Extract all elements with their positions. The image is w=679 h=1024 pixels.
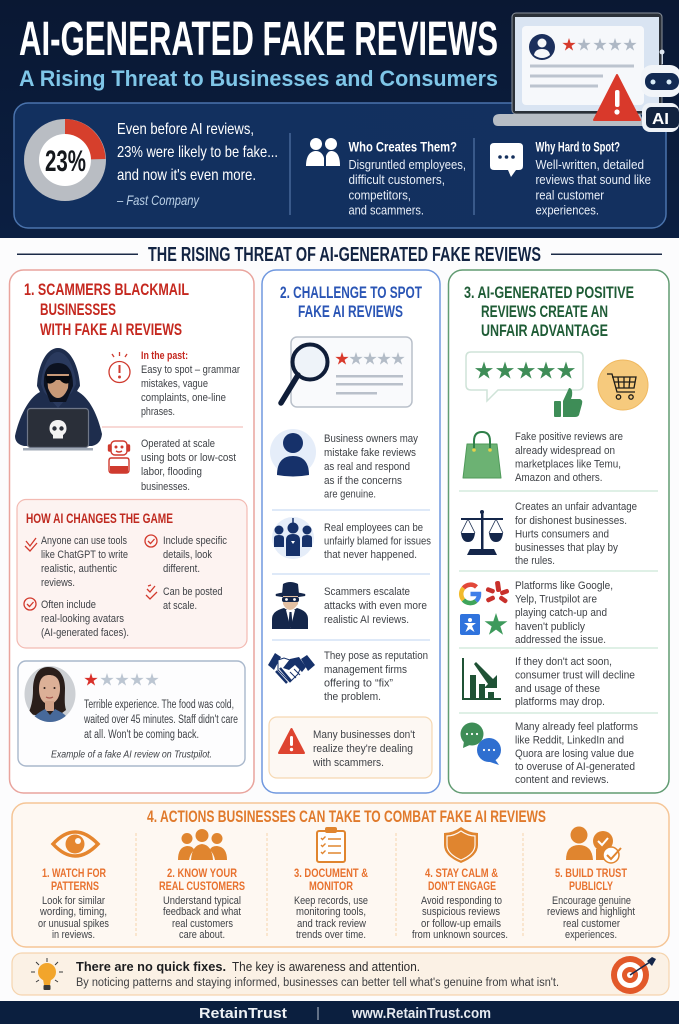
quote: Even before AI reviews, <box>117 121 254 138</box>
text: unfair advantage: Creates an unfair advantage <box>515 501 637 513</box>
text: in the past: Easy to spot – grammar <box>141 364 240 376</box>
caption: Example of a fake AI review on Trustpilot. <box>51 750 212 760</box>
text: no quick fixes <box>76 959 559 989</box>
text: right list: Include specific <box>163 535 227 547</box>
callout: how AI changes the game: HOW AI CHANGES THE GAME <box>26 510 173 526</box>
quote <box>116 121 278 208</box>
panel 1: scammers blackmail <box>10 270 254 793</box>
block: why hard to spot: experiences. <box>536 202 599 218</box>
icon: robot: AI <box>652 111 669 128</box>
action 1: watch for patterns: or unusual spikes <box>38 918 109 930</box>
text: losing value: Quora are losing value due <box>515 748 634 760</box>
action 1: watch for patterns <box>38 832 109 941</box>
illustration: magnifier over review card <box>281 337 412 407</box>
text: business owners: Business owners may <box>324 433 418 445</box>
section heading: THE RISING THREAT OF AI-GENERATED FAKE REVIEWS <box>148 244 541 266</box>
action 3: document and monitor: and track review <box>297 918 366 930</box>
text: operated at scale: labor, flooding <box>141 466 202 478</box>
text: marketplaces: Amazon and others. <box>515 472 602 484</box>
action 4: stay calm: or follow-up emails <box>421 918 501 930</box>
text: consumer trust: If they don't act soon, <box>515 656 612 668</box>
panel 2 heading <box>280 284 422 321</box>
block: who creates them: competitors, <box>348 188 411 202</box>
panel 2 heading: FAKE AI REVIEWS <box>298 303 403 321</box>
panel 3 heading <box>464 284 634 340</box>
icon: handshake <box>268 653 315 683</box>
action 5: build trust <box>547 826 635 941</box>
icon: robot <box>641 50 679 132</box>
text: consumer trust: consumer trust will decline <box>515 670 635 682</box>
icon: chat bubble <box>490 143 523 177</box>
block: why hard to spot: real customer <box>536 188 605 202</box>
text: marketplaces: already widespread on <box>515 445 615 457</box>
action 4: stay calm: DON'T ENGAGE <box>428 879 496 893</box>
text: left list: reviews. <box>41 577 75 589</box>
block: who creates them <box>348 138 466 218</box>
text: reputation firms: management firms <box>324 664 407 676</box>
icon: bot <box>108 441 130 473</box>
quote: and now it's even more. <box>117 167 256 184</box>
action 4: stay calm: 4. STAY CALM & <box>425 866 498 880</box>
text: left list: real-looking avatars <box>41 613 124 625</box>
text: scammers escalate: attacks with even more <box>324 600 427 612</box>
text: reputation firms: They pose as reputation <box>324 650 428 662</box>
text: left list: (AI-generated faces). <box>41 627 129 639</box>
action 3: document and monitor: MONITOR <box>309 879 353 893</box>
footer <box>0 1001 679 1024</box>
text: consumer trust <box>515 656 635 708</box>
action 4: stay calm: suspicious reviews <box>422 906 500 918</box>
icon: check marks <box>24 535 157 610</box>
text: losing value: to overuse of AI-generated <box>515 761 635 773</box>
text: in the past: mistakes, vague <box>141 378 208 390</box>
text: platforms: haven't publicly <box>515 621 585 633</box>
text: warning: realize they're dealing <box>313 743 413 755</box>
block: why hard to spot: Well-written, detailed <box>536 157 644 172</box>
icon: clipboard <box>317 827 345 862</box>
action 5: build trust: 5. BUILD TRUST <box>555 866 628 880</box>
text: operated at scale: Operated at scale <box>141 438 215 450</box>
icon: target with arrow <box>611 956 656 994</box>
text: no quick fixes: The key is awareness and attention. <box>232 959 420 974</box>
action 5: build trust: experiences. <box>565 929 617 941</box>
text: in the past: phrases. <box>141 406 175 418</box>
text: unfair advantage: for dishonest businesses. <box>515 515 627 527</box>
subtitle: A Rising Threat to Businesses and Consumers <box>19 66 498 91</box>
text: left list: like ChatGPT to write <box>41 549 128 561</box>
text: employees: Real employees can be <box>324 522 423 534</box>
action 3: document and monitor: 3. DOCUMENT & <box>294 866 368 880</box>
action 2: know your real customers: care about. <box>179 929 225 941</box>
text: left list: Often include <box>41 599 96 611</box>
callout: warning <box>269 717 432 778</box>
text: right list: at scale. <box>163 600 197 612</box>
icon: warning <box>279 729 304 753</box>
text: review: at all. Won't be coming back. <box>84 729 199 741</box>
text: unfair advantage: businesses that play by <box>515 542 618 554</box>
action 5: build trust: PUBLICLY <box>569 879 613 893</box>
text: unfair advantage: the rules. <box>515 555 555 567</box>
icon: shopping cart <box>598 360 648 410</box>
panel 2 heading: 2. CHALLENGE TO SPOT <box>280 284 422 302</box>
action 4: stay calm: from unknown sources. <box>412 929 508 941</box>
action 2: know your real customers: Understand typical <box>163 895 241 907</box>
action 5: build trust: Encourage genuine <box>552 895 631 907</box>
text: warning: with scammers. <box>312 757 384 769</box>
text: platforms: Yelp, Trustpilot are <box>515 594 597 606</box>
donut chart: 23%: 23% <box>45 145 86 178</box>
panel 3: positive reviews <box>448 270 669 793</box>
panel 1 heading: WITH FAKE AI REVIEWS <box>40 321 182 339</box>
action 2: know your real customers: real customers <box>172 918 233 930</box>
icon: scammer in hat <box>272 582 308 629</box>
icon: alert circle <box>109 352 130 382</box>
text: warning: Many businesses don't <box>313 729 415 741</box>
block: why hard to spot: Why Hard to Spot? <box>536 138 620 154</box>
icon: customers <box>178 829 227 860</box>
action 5: build trust: real customer <box>563 918 620 930</box>
action 3: document and monitor: monitoring tools, <box>296 906 366 918</box>
block: why hard to spot <box>536 138 651 218</box>
block: why hard to spot: reviews that sound like <box>536 172 651 187</box>
stats panel <box>14 103 666 228</box>
callout: how AI changes the game <box>17 500 247 648</box>
text: no quick fixes: There are no quick fixes. <box>76 959 226 974</box>
icon: person with checks <box>566 826 621 863</box>
action 5: build trust: reviews and highlight <box>547 906 635 918</box>
icon: hooded hacker with laptop <box>15 348 102 450</box>
icon: declining chart <box>463 658 501 699</box>
text: business owners: as if the concerns <box>324 475 402 487</box>
text: unfair advantage <box>515 501 637 567</box>
text: no quick fixes: By noticing patterns and staying informed, businesses can better tell what's genuine from what isn't. <box>76 977 559 989</box>
text: reputation firms <box>324 650 428 703</box>
icon: laptop with one-star review <box>493 13 662 126</box>
text: platforms: Platforms like Google, <box>515 580 613 592</box>
text: reputation firms: the problem. <box>324 691 381 703</box>
block: who creates them: Who Creates Them? <box>348 138 457 154</box>
text: employees: that never happened. <box>324 549 417 561</box>
action 1: watch for patterns: PATTERNS <box>51 879 99 893</box>
text: consumer trust: platforms may drop. <box>515 696 605 708</box>
icon: scales of justice <box>461 510 503 555</box>
text: in the past: complaints, one-line <box>141 392 226 404</box>
icon: shopping bag <box>463 432 501 478</box>
quote: – Fast Company <box>116 192 200 208</box>
takeaway bar <box>12 953 669 995</box>
icon: shield <box>444 827 478 863</box>
text: platforms: playing catch-up and <box>515 607 607 619</box>
text: operated at scale: using bots or low-cost <box>141 452 236 464</box>
icon: business owner <box>270 429 316 476</box>
text: employees: unfairly blamed for issues <box>324 536 431 548</box>
action 1: watch for patterns: in reviews. <box>52 929 95 941</box>
icon: chat bubbles <box>460 722 501 765</box>
panel 1 heading <box>24 281 189 339</box>
action 4: stay calm <box>412 827 508 941</box>
text: marketplaces: Fake positive reviews are <box>515 431 623 443</box>
text: business owners: as real and respond <box>324 461 410 473</box>
header banner <box>0 0 679 238</box>
text: review: Terrible experience. The food was cold, <box>84 699 234 711</box>
action 2: know your real customers: feedback and what <box>163 906 241 918</box>
action 1: watch for patterns: 1. WATCH FOR <box>42 866 106 880</box>
text: warning <box>312 729 415 769</box>
text: unfair advantage: Hurts consumers and <box>515 528 609 540</box>
icon: warning triangle <box>594 75 640 120</box>
text: platforms: addressed the issue. <box>515 634 606 646</box>
text: scammers escalate <box>324 586 427 626</box>
text: employees <box>324 522 431 561</box>
rating: one star <box>84 673 159 686</box>
panel 4: actions <box>12 803 669 947</box>
text: losing value <box>515 721 638 786</box>
panel 1 heading: BUSINESSES <box>40 301 116 319</box>
text: platforms <box>515 580 613 646</box>
block: who creates them: Disgruntled employees, <box>348 157 466 172</box>
photo: AI-generated face <box>24 665 76 724</box>
text: left list <box>41 535 129 639</box>
text: scammers escalate: Scammers escalate <box>324 586 410 598</box>
icons: platform logos <box>460 581 510 635</box>
text: losing value: like Reddit, LinkedIn and <box>515 734 624 746</box>
action 3: document and monitor <box>294 827 368 941</box>
footer: RetainTrust <box>199 1005 287 1022</box>
text: right list: Can be posted <box>163 586 222 598</box>
text: business owners: mistake fake reviews <box>324 447 416 459</box>
action 2: know your real customers: REAL CUSTOMERS <box>159 879 245 893</box>
donut chart: 23% <box>24 119 106 201</box>
action 3: document and monitor: trends over time. <box>296 929 366 941</box>
action 1: watch for patterns: Look for similar <box>42 895 105 907</box>
text: losing value: Many already feel platforms <box>515 721 638 733</box>
text: reputation firms: offering to “fix” <box>324 678 393 690</box>
block: who creates them: and scammers. <box>348 202 424 218</box>
text: business owners: are genuine. <box>324 488 376 500</box>
action 3: document and monitor: Keep records, use <box>294 895 368 907</box>
text: business owners <box>324 433 418 500</box>
text: marketplaces: marketplaces like Temu, <box>515 458 621 470</box>
icon: people <box>306 138 340 166</box>
action 2: know your real customers: 2. KNOW YOUR <box>167 866 237 880</box>
icon: light bulb <box>31 958 63 990</box>
text: right list: details, look <box>163 549 212 561</box>
action 2: know your real customers <box>159 829 245 941</box>
quote: 23% were likely to be fake... <box>117 144 278 161</box>
text: left list: realistic, authentic <box>41 563 117 575</box>
text: losing value: content and reviews. <box>515 774 609 786</box>
card: example fake review <box>18 661 245 766</box>
text: review <box>83 699 238 741</box>
text: scammers escalate: realistic AI reviews. <box>324 614 409 626</box>
text: review: waited over 45 minutes. Staff didn't care <box>83 714 238 726</box>
footer: www.RetainTrust.com <box>351 1005 491 1022</box>
text: consumer trust: and usage of these <box>515 683 600 695</box>
illustration: five-star bubble with thumb <box>466 352 583 417</box>
icon: eye <box>53 832 98 856</box>
action 1: watch for patterns: wording, timing, <box>39 906 107 918</box>
text: marketplaces <box>515 431 623 484</box>
text: operated at scale <box>141 438 236 493</box>
text: operated at scale: businesses. <box>141 481 190 493</box>
icon: employees <box>272 517 314 559</box>
panel 1 heading: 1. SCAMMERS BLACKMAIL <box>24 281 189 299</box>
panel 3 heading: REVIEWS CREATE AN <box>481 303 608 321</box>
text: right list <box>163 535 227 612</box>
text: in the past <box>141 350 240 418</box>
panel 3 heading: UNFAIR ADVANTAGE <box>481 322 608 340</box>
text: in the past: In the past: <box>141 350 188 362</box>
text: left list: Anyone can use tools <box>41 535 127 547</box>
panel 2: challenge to spot <box>262 270 440 793</box>
block: who creates them: difficult customers, <box>348 172 445 187</box>
text: right list: different. <box>163 563 200 575</box>
action 4: stay calm: Avoid responding to <box>421 895 502 907</box>
